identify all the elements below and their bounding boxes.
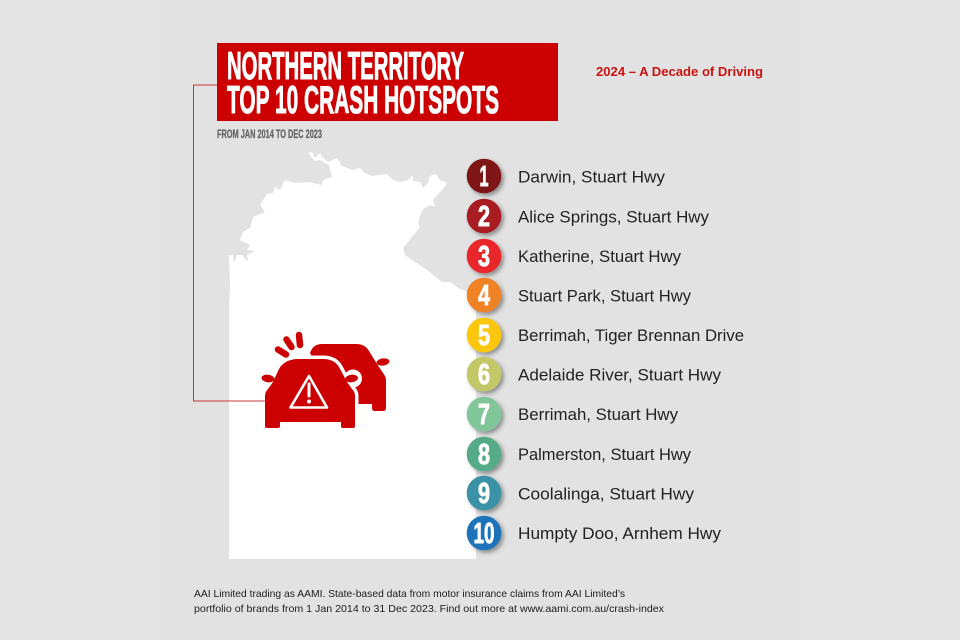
item 2 xyxy=(467,199,709,233)
item 3: 3 xyxy=(478,241,490,273)
back car xyxy=(310,344,390,411)
warning triangle xyxy=(290,376,327,408)
map: Northern Territory xyxy=(229,152,476,559)
item 7: Berrimah, Stuart Hwy xyxy=(518,405,678,424)
footnote xyxy=(194,589,665,615)
item 6: Adelaide River, Stuart Hwy xyxy=(518,366,721,384)
item 1: 1 xyxy=(480,161,488,193)
item 7 xyxy=(467,397,678,431)
item 7: 7 xyxy=(478,399,490,431)
item 5: 5 xyxy=(478,320,490,352)
item 5 xyxy=(467,318,744,352)
item 4 xyxy=(467,278,691,312)
item 6: 6 xyxy=(478,359,490,391)
ranked list xyxy=(467,159,744,550)
item 10 xyxy=(467,516,721,550)
item 9: 9 xyxy=(478,478,490,510)
icon: crashed cars xyxy=(261,335,390,428)
item 9: Coolalinga, Stuart Hwy xyxy=(518,484,695,504)
item 4: 4 xyxy=(478,280,490,312)
item 4: Stuart Park, Stuart Hwy xyxy=(518,286,691,306)
item 3 xyxy=(467,239,681,273)
item 9 xyxy=(467,476,695,510)
item 8: Palmerston, Stuart Hwy xyxy=(518,445,691,464)
title line 1: NORTHERN TERRITORY xyxy=(227,45,464,88)
footnote: AAI Limited trading as AAMI. State-based data from motor insurance claims from AAI Limited’s xyxy=(194,589,625,600)
item 10: 10 xyxy=(474,518,494,550)
item 8 xyxy=(467,437,691,471)
title banner xyxy=(217,43,558,122)
item 10: Humpty Doo, Arnhem Hwy xyxy=(518,524,721,543)
item 2: 2 xyxy=(478,201,490,233)
item 6 xyxy=(467,357,721,391)
item 2: Alice Springs, Stuart Hwy xyxy=(518,208,709,226)
item 1 xyxy=(467,159,666,193)
item 8: 8 xyxy=(478,439,490,471)
footnote: portfolio of brands from 1 Jan 2014 to 31 Dec 2023. Find out more at www.aami.com.au/crash-index xyxy=(194,604,665,615)
item 5: Berrimah, Tiger Brennan Drive xyxy=(518,326,744,345)
title line 2: TOP 10 CRASH HOTSPOTS xyxy=(227,79,499,122)
tagline: 2024 – A Decade of Driving xyxy=(596,65,763,79)
impact rays xyxy=(278,335,300,354)
subtitle: date range: FROM JAN 2014 TO DEC 2023 xyxy=(217,129,322,141)
item 3: Katherine, Stuart Hwy xyxy=(518,247,681,266)
item 1: Darwin, Stuart Hwy xyxy=(518,168,666,186)
front car xyxy=(261,359,362,428)
connector line xyxy=(194,85,266,401)
